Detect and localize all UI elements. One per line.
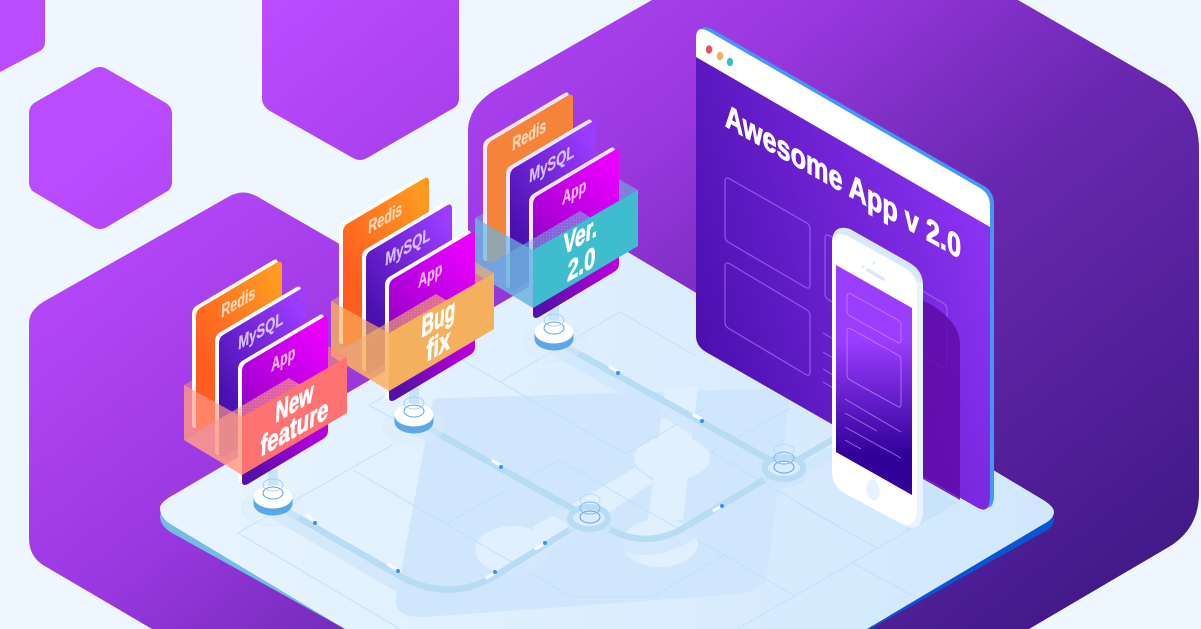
box front [533,190,638,308]
window control dots [706,45,733,66]
card: App [529,148,619,318]
deployment: bug fix [331,176,494,444]
card: App: App [418,257,443,293]
platform [160,244,1054,629]
card: MySQL: MySQL [385,223,431,271]
card: MySQL [506,120,596,290]
card: Redis [192,260,282,430]
box label: New [275,375,315,429]
card: Redis: Redis [221,282,256,323]
card: MySQL: MySQL [238,307,284,355]
box label: Bug [421,291,456,344]
box front [389,273,494,391]
git branch tracks [273,340,832,601]
phone shadow on platform [905,480,957,532]
card: Redis [483,93,573,263]
pin [242,470,304,526]
box label: 2.0 [567,240,596,288]
deployment: new feature [184,260,347,526]
box front [242,357,347,475]
pin [383,388,445,444]
box label: feature [260,392,329,463]
box label [563,209,598,288]
window title: Awesome App v 2.0 [725,96,961,267]
card: App: App [562,174,587,210]
card: App [385,231,475,401]
git logo watermark [396,386,791,617]
card: MySQL: MySQL [529,140,575,188]
box label: fix [426,321,451,368]
junction node right [762,444,806,488]
card: Redis: Redis [368,198,403,239]
box label [421,291,456,368]
phone home button [865,479,881,501]
deployment: ver 2.0 [475,93,638,361]
phone [832,228,923,528]
phone shadow on window [900,290,960,500]
card: App: App [271,341,296,377]
pin [523,305,585,361]
phone wireframe [845,293,901,458]
window wireframe [725,178,947,392]
card: MySQL [215,287,305,457]
card: MySQL [362,203,452,373]
junction node left [567,494,611,539]
card: App [238,315,328,485]
card: Redis: Redis [512,115,547,156]
phone screen [836,265,912,495]
phone speaker [862,262,883,279]
track markers [305,365,724,580]
card: Redis [339,176,429,346]
box label: Ver. [563,209,598,261]
browser window [696,27,994,510]
